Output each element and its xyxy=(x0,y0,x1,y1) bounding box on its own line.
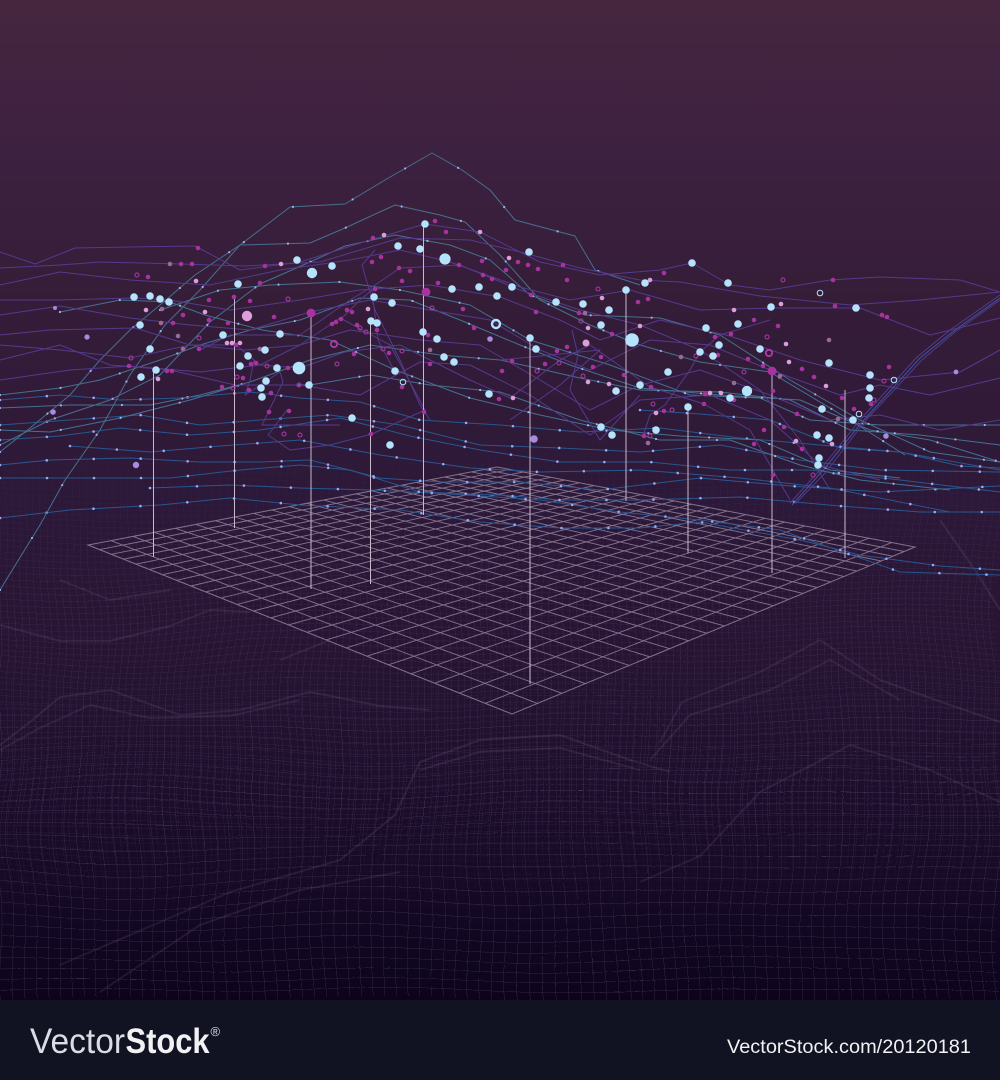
measurement poles xyxy=(154,224,845,684)
footer URL: VectorStock.com/20120181 xyxy=(727,1036,971,1058)
floor grid xyxy=(88,467,915,714)
large accent nodes xyxy=(242,288,776,375)
rising blue bundle xyxy=(792,298,1000,505)
footer logo: Stock xyxy=(126,1022,210,1061)
purple data lines xyxy=(0,224,1000,503)
light blue data points xyxy=(134,224,870,465)
muted mauve data points xyxy=(161,264,838,443)
footer bar xyxy=(0,1000,1000,1080)
teal line nodes xyxy=(0,153,1000,590)
blue line nodes xyxy=(0,392,1000,575)
large light blue nodes xyxy=(293,253,752,396)
terrain wireframe xyxy=(0,477,1000,1000)
footer logo: ® xyxy=(210,1024,220,1039)
footer logo: Vector xyxy=(30,1022,125,1061)
light blue ring nodes xyxy=(400,290,897,417)
ring markers xyxy=(129,273,886,477)
magenta data points xyxy=(129,221,889,475)
pink data points xyxy=(146,232,832,444)
teal data lines xyxy=(0,153,1000,590)
lavender nodes xyxy=(50,306,958,468)
blue lower data lines xyxy=(0,392,1000,575)
footer logo xyxy=(30,1022,220,1061)
